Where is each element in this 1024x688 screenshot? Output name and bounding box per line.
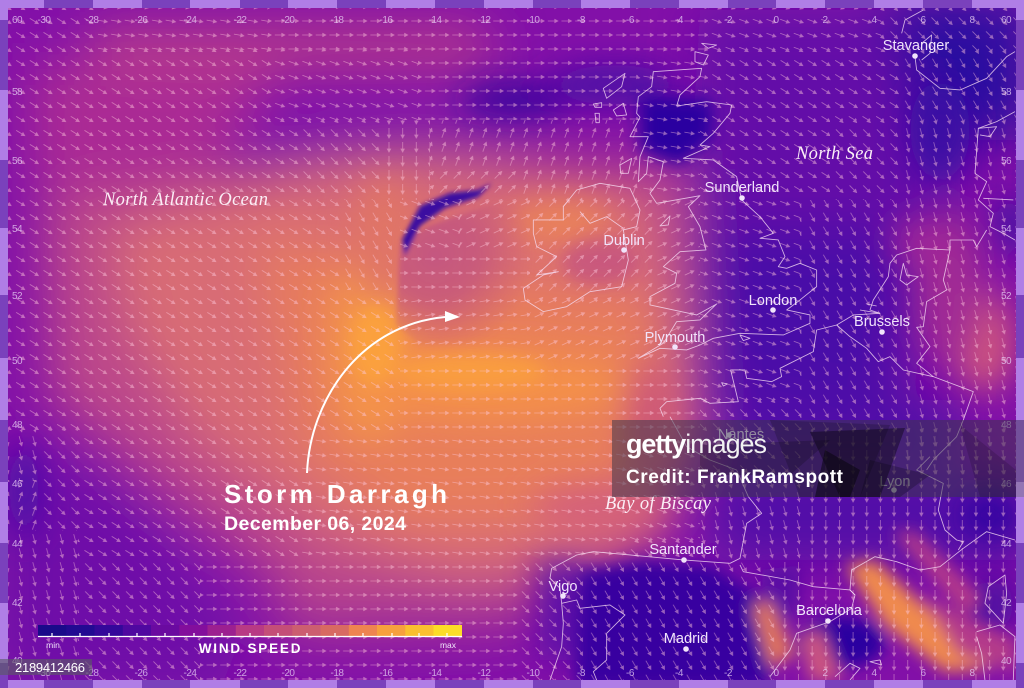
latitude and longitude grid labels: -4 <box>675 668 684 679</box>
city dots and names: Plymouth <box>645 330 705 346</box>
storm date: December 06, 2024 <box>224 513 406 535</box>
city dots and names: Brussels <box>854 314 910 330</box>
latitude and longitude grid labels: 40 <box>12 656 23 667</box>
latitude and longitude grid labels: 44 <box>12 539 23 550</box>
latitude and longitude grid labels: -16 <box>380 668 393 679</box>
latitude and longitude grid labels: -28 <box>86 15 99 26</box>
latitude and longitude grid labels: 48 <box>12 420 23 431</box>
latitude and longitude grid labels: 48 <box>1001 420 1012 431</box>
latitude and longitude grid labels: -16 <box>380 15 393 26</box>
latitude and longitude grid labels: -14 <box>429 15 442 26</box>
France, Benelux and German coast <box>660 230 987 470</box>
curved storm track arrow <box>307 311 460 473</box>
city dots and names: Stavanger <box>883 38 949 54</box>
watermark credit line: Credit: FrankRamspott <box>626 467 844 488</box>
sea name labels: North Sea <box>795 144 873 164</box>
latitude and longitude grid labels: 56 <box>12 156 23 167</box>
legend min label: min <box>46 640 60 650</box>
latitude and longitude grid labels: 8 <box>969 15 975 26</box>
latitude and longitude grid labels: -20 <box>282 15 295 26</box>
latitude and longitude grid labels: 42 <box>12 598 23 609</box>
legend title: WIND SPEED <box>199 641 302 656</box>
latitude and longitude grid labels: -2 <box>724 668 733 679</box>
city dots and names <box>549 38 949 652</box>
latitude and longitude grid labels: 44 <box>1001 539 1012 550</box>
latitude and longitude grid labels: -14 <box>429 668 442 679</box>
image id tag: 2189412466 <box>15 660 85 675</box>
latitude and longitude grid labels: -10 <box>527 668 540 679</box>
Bay of Biscay, Spain, Portugal and Mediterranean coasts <box>550 417 1015 680</box>
latitude and longitude grid labels: -12 <box>478 668 491 679</box>
latitude and longitude grid labels: 54 <box>1001 224 1012 235</box>
latitude and longitude grid labels: -6 <box>626 668 635 679</box>
city dots and names: Sunderland <box>705 180 779 196</box>
watermark brand name: gettyimages <box>626 429 767 459</box>
wind speed legend <box>38 625 462 656</box>
latitude and longitude grid labels: -10 <box>527 15 540 26</box>
city dots and names: Lyon <box>879 474 911 490</box>
latitude and longitude grid labels: 60 <box>12 15 23 26</box>
latitude and longitude grid labels: 52 <box>12 291 23 302</box>
sea name labels <box>102 144 873 514</box>
latitude and longitude grid labels: -20 <box>282 668 295 679</box>
latitude and longitude grid labels: 40 <box>1001 656 1012 667</box>
sea name labels: North Atlantic Ocean <box>102 190 268 210</box>
latitude and longitude grid labels: 0 <box>773 668 779 679</box>
latitude and longitude grid labels: -18 <box>331 15 344 26</box>
latitude and longitude grid labels: -6 <box>626 15 635 26</box>
latitude and longitude grid labels: 46 <box>1001 479 1012 490</box>
watermark dark shards <box>700 420 1016 497</box>
latitude and longitude grid labels: -2 <box>724 15 733 26</box>
latitude and longitude grid labels: 58 <box>1001 87 1012 98</box>
latitude and longitude grid labels: 46 <box>12 479 23 490</box>
latitude and longitude grid labels: 6 <box>920 15 926 26</box>
city dots and names: Madrid <box>664 631 708 647</box>
city dots and names: Santander <box>649 542 717 558</box>
latitude and longitude grid labels: 0 <box>773 15 779 26</box>
city dots and names: Vigo <box>549 579 577 595</box>
Great Britain and Ireland outlines <box>523 43 817 358</box>
latitude and longitude grid labels: -30 <box>38 15 51 26</box>
latitude and longitude grid labels: 2 <box>822 668 828 679</box>
latitude and longitude grid labels: -8 <box>577 668 586 679</box>
latitude and longitude grid labels: 42 <box>1001 598 1012 609</box>
storm title: Storm Darragh <box>224 479 447 509</box>
sea name labels: Bay of Biscay <box>605 494 712 514</box>
Norway and Denmark coasts <box>902 10 1015 240</box>
latitude and longitude grid labels: -24 <box>184 15 197 26</box>
latitude and longitude grid labels: -26 <box>135 15 148 26</box>
latitude and longitude grid labels: 4 <box>871 668 877 679</box>
latitude and longitude grid labels: 52 <box>1001 291 1012 302</box>
city dots and names: London <box>749 293 797 309</box>
stock image watermark <box>612 420 1024 497</box>
latitude and longitude grid labels: -8 <box>577 15 586 26</box>
latitude and longitude grid labels: -18 <box>331 668 344 679</box>
latitude and longitude grid labels: -22 <box>234 668 247 679</box>
latitude and longitude grid labels: 4 <box>871 15 877 26</box>
latitude and longitude grid labels: -30 <box>38 668 51 679</box>
latitude and longitude grid labels: 6 <box>920 668 926 679</box>
latitude and longitude grid labels: -4 <box>675 15 684 26</box>
latitude and longitude grid labels: 2 <box>822 15 828 26</box>
latitude and longitude grid labels: 58 <box>12 87 23 98</box>
city dots and names: Dublin <box>603 233 645 249</box>
city dots and names: Nantes <box>718 427 764 443</box>
latitude and longitude grid labels: 54 <box>12 224 23 235</box>
latitude and longitude grid labels: -28 <box>86 668 99 679</box>
latitude and longitude grid labels: 60 <box>1001 15 1012 26</box>
latitude and longitude grid labels: 56 <box>1001 156 1012 167</box>
city dots and names: Barcelona <box>796 603 863 619</box>
latitude and longitude grid labels: -24 <box>184 668 197 679</box>
coastlines and country borders <box>523 10 1015 680</box>
legend max label: max <box>440 640 457 650</box>
latitude and longitude grid labels: -12 <box>478 15 491 26</box>
latitude and longitude grid labels: 8 <box>969 668 975 679</box>
latitude and longitude grid labels: -22 <box>234 15 247 26</box>
latitude and longitude grid labels: 50 <box>12 356 23 367</box>
latitude and longitude grid labels: -26 <box>135 668 148 679</box>
latitude and longitude grid labels: 50 <box>1001 356 1012 367</box>
colour scale bar <box>38 625 462 636</box>
